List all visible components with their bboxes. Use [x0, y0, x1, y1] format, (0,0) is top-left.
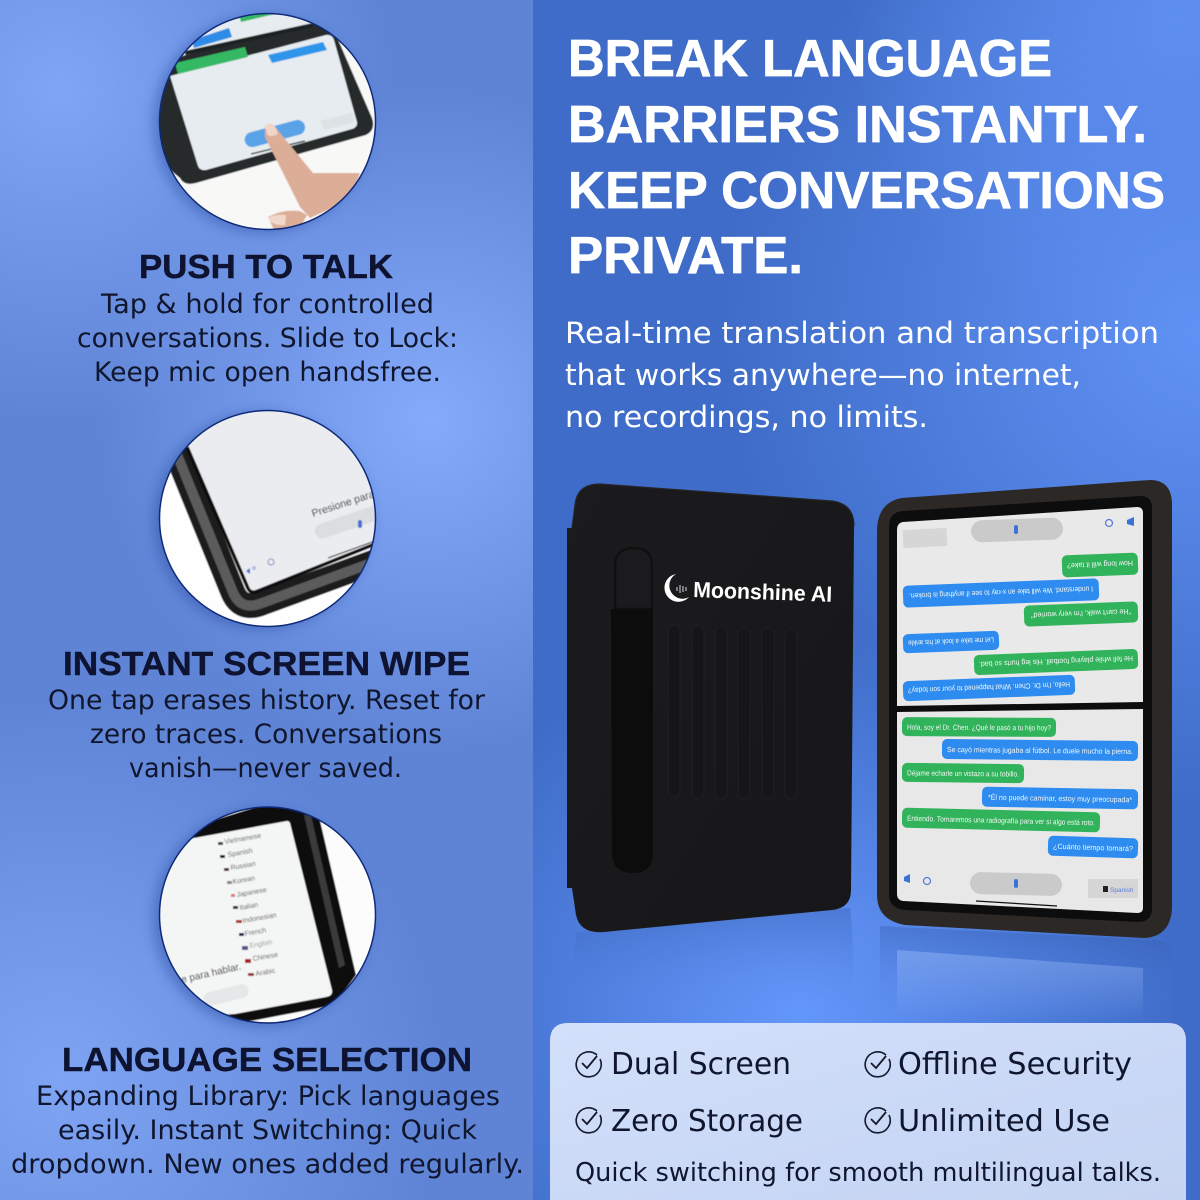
- bottom screen chat bubbles: [902, 717, 1138, 858]
- top screen chat bubbles: Hello, I'm Dr. Chen. What happened to your son today?: [908, 680, 1070, 695]
- text block: One tap erases history. Reset for: [48, 685, 486, 716]
- icon: language list photo circle: Korean: [232, 875, 256, 886]
- icon: language list photo circle: Arabic: [255, 968, 276, 978]
- subtitle: that works anywhere—no internet,: [565, 358, 1081, 392]
- title: BREAK LANGUAGE: [568, 30, 1052, 88]
- text block: [11, 1081, 524, 1180]
- screen controls: [903, 517, 1138, 906]
- device: open dual screen tablet: [877, 480, 1172, 938]
- subtitle: no recordings, no limits.: [565, 400, 928, 434]
- text block: easily. Instant Switching: Quick: [58, 1115, 477, 1146]
- text block: [77, 289, 458, 388]
- text block: zero traces. Conversations: [90, 719, 442, 750]
- logo: Moonshine AI: Moonshine AI: [693, 577, 833, 607]
- subtitle: [565, 316, 1159, 434]
- icon: language list photo circle: English: [249, 939, 273, 950]
- screen controls: Spanish: [1110, 887, 1134, 894]
- heading: LANGUAGE SELECTION: [62, 1041, 472, 1078]
- feature: language selection: [11, 798, 524, 1180]
- icon: tablet corner photo circle: [153, 405, 393, 630]
- top screen chat bubbles: He fell while playing football. His leg hurts so bad.: [979, 654, 1133, 669]
- heading: PUSH TO TALK: [139, 248, 393, 285]
- title: PRIVATE.: [568, 227, 803, 285]
- top screen chat bubbles: "He can't walk, I'm very worried": [1031, 607, 1131, 620]
- icon: tablet with finger photo circle: [150, 5, 380, 235]
- panel: left background: [0, 0, 533, 1200]
- title: KEEP CONVERSATIONS: [568, 162, 1165, 220]
- item: unlimited use: Unlimited Use: [898, 1104, 1110, 1139]
- icon: language list photo circle: Italian: [239, 902, 259, 912]
- top screen chat bubbles: Let me take a look at his ankle: [908, 635, 994, 648]
- text block: [48, 685, 486, 784]
- ribs: [668, 625, 797, 799]
- title: BARRIERS INSTANTLY.: [568, 96, 1147, 154]
- subtitle: Real-time translation and transcription: [565, 316, 1159, 350]
- bottom screen chat bubbles: Hola, soy el Dr. Chen. ¿Qué le pasó a tu hijo hoy?: [907, 723, 1051, 732]
- item: offline security: Offline Security: [898, 1047, 1132, 1082]
- item: zero storage: Zero Storage: [611, 1104, 803, 1139]
- text block: conversations. Slide to Lock:: [77, 323, 458, 354]
- title: [568, 30, 1165, 285]
- icon: language list photo circle: Russian: [230, 861, 256, 872]
- feature: push to talk: [77, 5, 458, 388]
- stylus pocket: [611, 548, 653, 873]
- icon: language list photo circle: Chinese: [252, 952, 279, 963]
- text block: Keep mic open handsfree.: [94, 357, 441, 388]
- icon: language list photo circle: Japanese: [236, 887, 267, 899]
- bottom screen chat bubbles: ¿Cuánto tiempo tomará?: [1053, 842, 1133, 853]
- top screen chat bubbles: I understand. We will take an x-ray to see if anything is broken.: [909, 584, 1093, 601]
- device reflections: [574, 908, 1173, 1020]
- bottom screen chat bubbles: Se cayó mientras jugaba al fútbol. Le duele mucho la pierna.: [947, 745, 1133, 756]
- text block: vanish—never saved.: [129, 753, 402, 784]
- icon: language list photo circle: French: [244, 927, 267, 938]
- feature: instant screen wipe: [48, 405, 486, 784]
- icon: language list photo circle: [150, 798, 380, 1030]
- text block: dropdown. New ones added regularly.: [11, 1149, 524, 1180]
- item: dual screen: Dual Screen: [611, 1047, 791, 1082]
- icon: language list photo circle: Spanish: [227, 848, 253, 859]
- top screen chat bubbles: How long will it take?: [1067, 559, 1133, 570]
- bottom screen chat bubbles: Déjame echarle un vistazo a su tobillo.: [907, 768, 1019, 779]
- panel: right background: [533, 0, 1200, 1200]
- icon: language list photo circle: Indonesian: [242, 912, 277, 925]
- icon: language list photo circle: Vietnamese: [224, 833, 262, 846]
- icon: tablet corner photo circle: Presione para ha: [310, 484, 390, 520]
- bottom screen chat bubbles: Entiendo. Tomaremos una radiografía para ver si algo está roto.: [907, 814, 1095, 827]
- icon: language list photo circle: e para hablar.: [180, 961, 242, 986]
- bottom screen chat bubbles: *Él no puede caminar, estoy muy preocupada*: [988, 793, 1132, 804]
- top screen chat bubbles: [903, 553, 1138, 701]
- caption: Quick switching for smooth multilingual talks.: [575, 1158, 1161, 1188]
- panel: feature checklist: [550, 1023, 1186, 1200]
- device: closed case with logo: [567, 484, 854, 932]
- heading: INSTANT SCREEN WIPE: [63, 645, 470, 682]
- text block: Expanding Library: Pick languages: [36, 1081, 500, 1112]
- text block: Tap & hold for controlled: [100, 289, 434, 320]
